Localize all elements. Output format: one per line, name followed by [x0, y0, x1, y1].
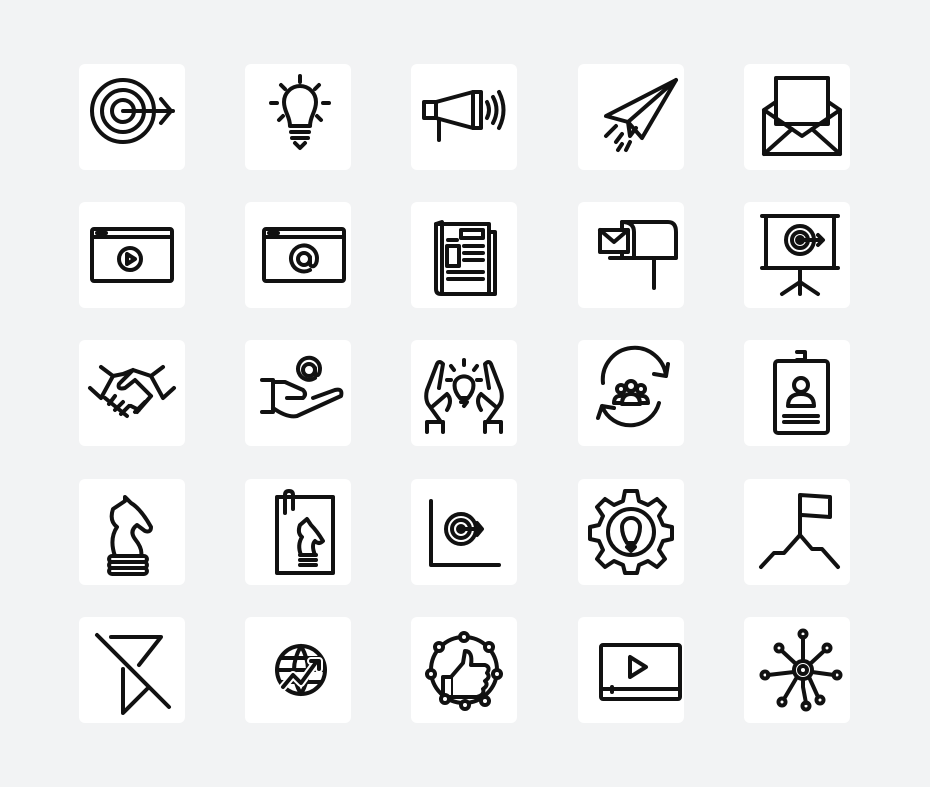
- icon card: handshake: [79, 340, 185, 446]
- icon card: chess knight: [79, 479, 185, 585]
- icon card: gear bulb: [578, 479, 684, 585]
- icon card: target: [79, 64, 185, 170]
- icon card: network hub: [744, 617, 850, 723]
- icon card: clipboard knight: [245, 479, 351, 585]
- icon card: id badge: [744, 340, 850, 446]
- icon card: globe growth: [245, 617, 351, 723]
- icon card: browser email: [245, 202, 351, 308]
- icon card: hands with bulb: [411, 340, 517, 446]
- icon card: megaphone: [411, 64, 517, 170]
- icon card: browser play: [79, 202, 185, 308]
- icon card: mountain flag: [744, 479, 850, 585]
- icon card: hand with email: [245, 340, 351, 446]
- icon card: envelope letter: [744, 64, 850, 170]
- icon card: thumbs up network: [411, 617, 517, 723]
- icon card: mailbox: [578, 202, 684, 308]
- icon card: paper plane: [578, 64, 684, 170]
- icon card: newspaper: [411, 202, 517, 308]
- icon card: light bulb: [245, 64, 351, 170]
- icon card: presentation target: [744, 202, 850, 308]
- icon card: team cycle: [578, 340, 684, 446]
- icon card: target chart: [411, 479, 517, 585]
- icon card: hourglass crossed: [79, 617, 185, 723]
- icon card: video player: [578, 617, 684, 723]
